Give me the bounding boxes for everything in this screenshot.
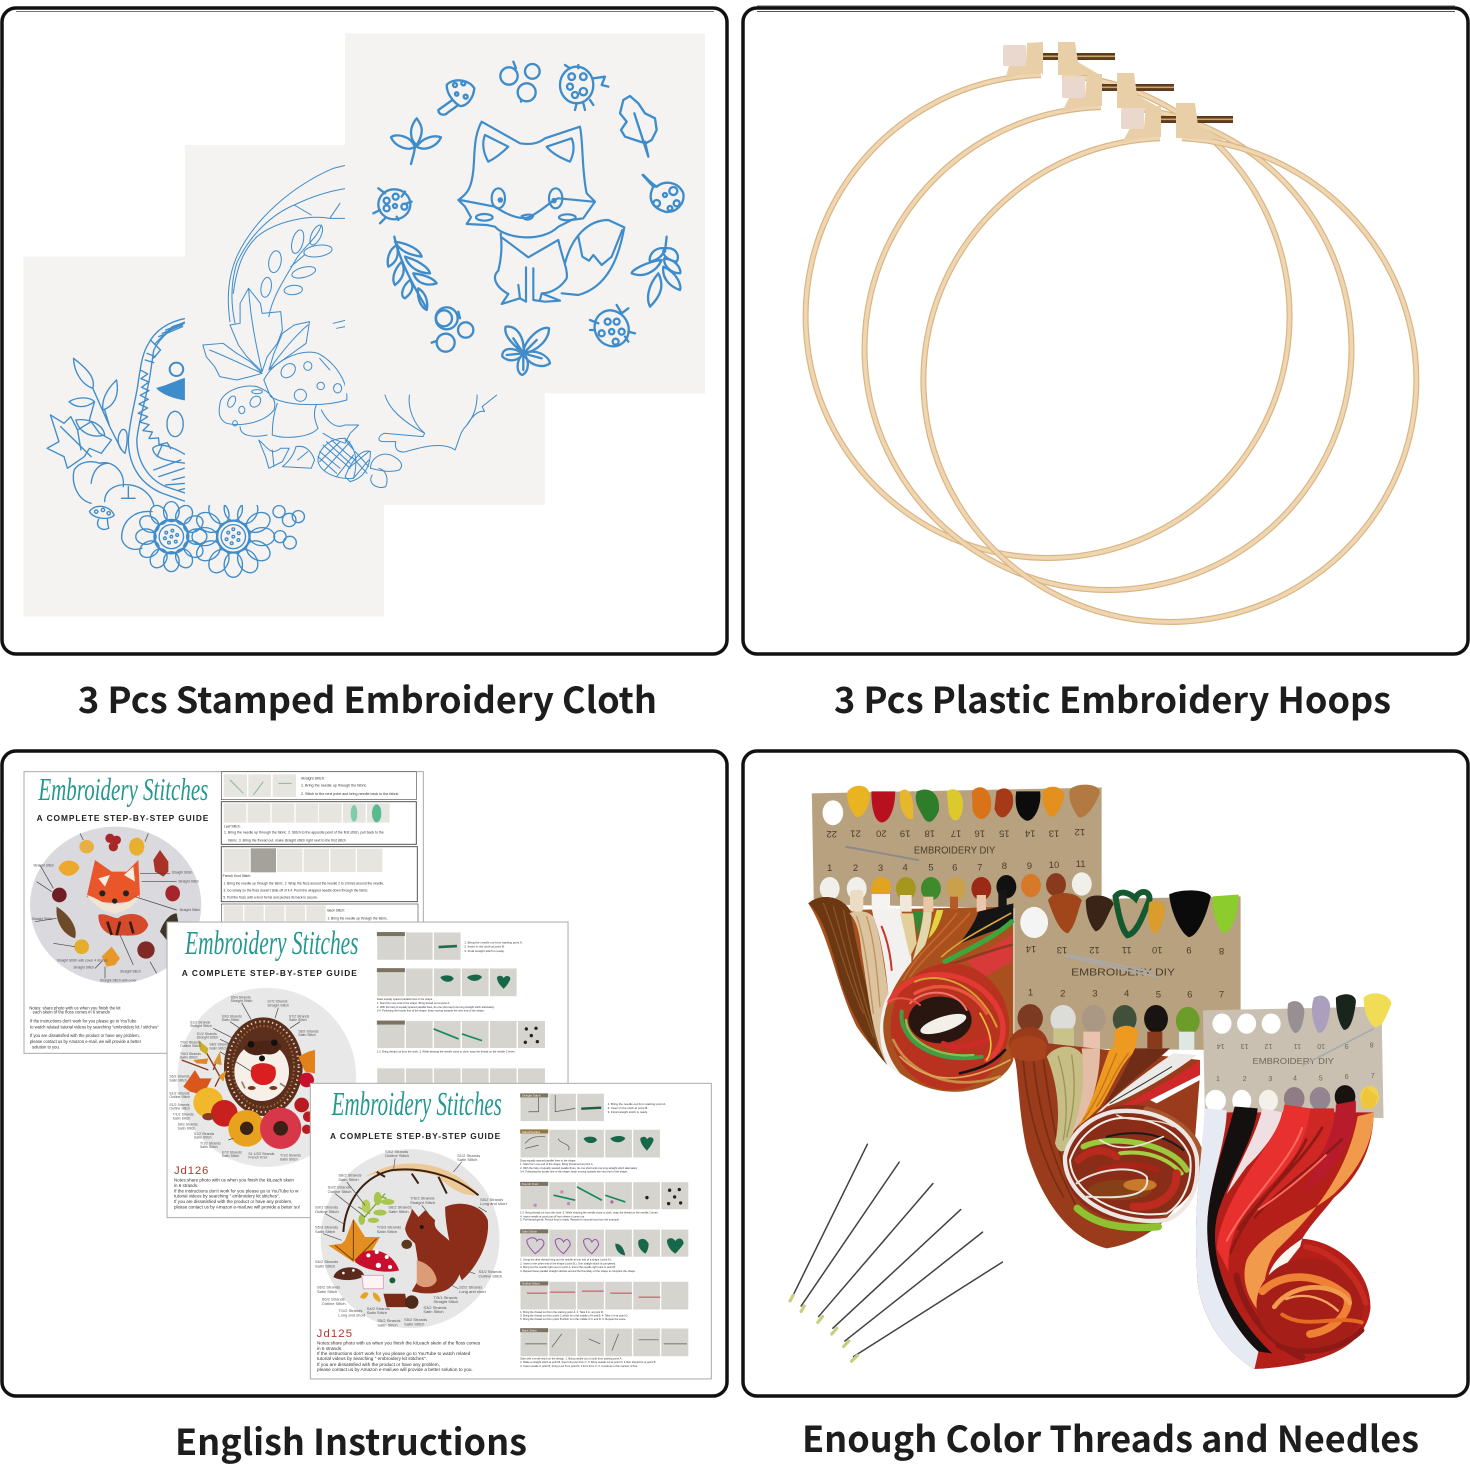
squirrel sheet stitch rows: 1. Bring the needle out from starting point A.: [608, 1102, 666, 1106]
squirrel leader labels: S5/2 Strands: [404, 1317, 427, 1322]
squirrel sheet stitch rows: 3. Final straight stitch is ready.: [608, 1110, 648, 1114]
hoop 2: [864, 73, 1351, 590]
hedgehog sheet notes: If you are dissatisfied with the product or have any problem,: [174, 1199, 292, 1204]
thread card 1: 20: [876, 828, 887, 839]
heading: instructions caption: English Instructions: [175, 1414, 527, 1466]
fox sheet leader labels: Straight Stitch: [178, 879, 199, 883]
thread card 1: 16: [974, 828, 985, 839]
thread card 1: 2: [853, 862, 858, 873]
thread card 1: 19: [900, 828, 910, 839]
fox sheet notes: solution to you.: [32, 1044, 60, 1049]
squirrel sheet stitch rows: Straight Stitch: [522, 1094, 541, 1098]
hedgehog leader labels: Straight Stitch: [231, 999, 252, 1003]
thread card 2: 10: [1152, 945, 1163, 956]
hedgehog leader labels: Satin Stitch: [180, 1056, 198, 1060]
hedgehog sheet stitch rows: Draw equally spaced parallel lines in the shape.: [377, 997, 433, 1001]
hedgehog leader labels: S1/2 Strands: [194, 1132, 214, 1136]
squirrel leader labels: S3/2 Strands: [478, 1269, 502, 1274]
squirrel sheet notes: If the instructions don't work for you please go to YouTube to watch related: [317, 1351, 471, 1356]
hedgehog sheet notes: Notes:share photo with us when you finish the kit,each skein: [174, 1177, 294, 1182]
squirrel sheet stitch rows: French Knot: [522, 1182, 538, 1186]
squirrel embroidery sample: [328, 1163, 488, 1309]
thread card 1: 10: [1049, 859, 1059, 870]
squirrel sheet stitch rows: Satin Stitch: [522, 1230, 537, 1234]
squirrel leader labels: Long and short: [338, 1312, 366, 1317]
fox sheet stitch rows: 3. Go slowly so the floss doesn't slide off of it 4. Push the wrapped needle down through the fabric.: [223, 889, 368, 893]
squirrel leader labels: S4/2 Strands: [367, 1306, 390, 1311]
sunflower left: [136, 502, 207, 572]
thread card 1: 4: [902, 861, 908, 872]
hedgehog leader labels: [169, 995, 319, 1161]
squirrel leader labels: S9/2 Strands: [385, 1149, 408, 1154]
hedgehog sheet stitch rows: [377, 932, 545, 1096]
ring of motifs around the fox: [52, 834, 180, 967]
hedgehog leader labels: S7/2 Strands: [222, 1150, 242, 1154]
hedgehog sheet stitch rows: 1. Start from one end of the shape. Bring thread out at point A.: [377, 1001, 450, 1005]
hoop 3: [923, 103, 1416, 622]
squirrel sheet stitch rows: Outline Stitch: [522, 1282, 540, 1286]
squirrel sheet stitch rows: 4. Repeat these parallel straight stitches around the boundary of the shape to complete the shape.: [520, 1269, 636, 1273]
squirrel sheet stitch rows: 3. Bring out the needle right next to point A. Insert the needle right next to point B.: [520, 1265, 616, 1269]
thread card 1: 12: [1075, 827, 1085, 838]
thread card 1: 15: [999, 828, 1010, 839]
hedgehog leader labels: Straight Stitch: [267, 1003, 289, 1007]
thread card 1: 8: [1002, 860, 1007, 871]
squirrel leader labels: Satin Stitch: [367, 1310, 387, 1315]
fox sheet stitch rows: 1. Bring the needle up through the fabric.: [327, 917, 388, 921]
thread card 1: 3: [878, 862, 883, 873]
squirrel leader labels: Straight Stitch: [410, 1200, 435, 1205]
squirrel leader labels: Satin Stitch: [404, 1321, 424, 1326]
squirrel leader labels: Satin Stitch: [377, 1322, 398, 1327]
hedgehog leader labels: Outline Stitch: [180, 1044, 201, 1048]
thread card 1: EMBROIDERY DIY: [914, 846, 995, 857]
squirrel leader labels: Outline Stitch: [315, 1209, 339, 1214]
hedgehog leader labels: Satin Stitch: [289, 1018, 307, 1022]
cloth sheet with hedgehog pattern: [23, 257, 384, 617]
squirrel leader labels: Satin Stitch: [457, 1157, 477, 1162]
squirrel sheet stitch rows: Satin/Padded: [522, 1130, 540, 1134]
squirrel leader labels: Outline Stitch: [478, 1273, 502, 1278]
hedgehog leader labels: S1/2 Strands: [197, 1032, 217, 1036]
thread card 3: 5: [1319, 1075, 1323, 1082]
squirrel sheet stitch rows: 2. Make a straight stitch at point B, then bring out from C. 3. Bring needle out at point D, it then should be at point B.: [520, 1360, 656, 1364]
hedgehog leader labels: Satin Stitch: [178, 1126, 195, 1130]
squirrel sheet stitch rows: 1. Using the dear thread bring out the needle at one end of a shape ( point A ).: [520, 1258, 612, 1262]
fox sheet leader labels: Straight Stitch with cover 4 strands: [57, 959, 108, 963]
instruction sheet with squirrel: Jd125: [317, 1328, 352, 1340]
thread card 3: 1: [1216, 1076, 1220, 1083]
thread card 3: 11: [1294, 1042, 1301, 1049]
fox sheet stitch rows: 1. Bring the needle up through the fabric. 2. Wrap the floss around the needle 2 to 3 times around the needle.: [223, 881, 384, 885]
fox sheet stitch rows: 5. Pull the floss until a knot forms and pushes its back in secure.: [223, 896, 318, 900]
thread card 2: 1: [1028, 987, 1033, 998]
fox sheet stitch rows: French Knot Stitch:: [223, 874, 251, 878]
hedgehog leader labels: S8/2 Strands: [209, 1043, 230, 1047]
fox embroidery sample: [87, 860, 148, 936]
panel: plastic embroidery hoops: [743, 6, 1468, 654]
fox sheet notes: Notes: share photo with us when you finish the kit: [29, 1005, 121, 1010]
thread card 1: 13: [1049, 828, 1059, 839]
hedgehog leader labels: S8/2 Strands: [178, 1123, 198, 1127]
hedgehog sheet stitch rows: 1-2. Bring thread out from the cloth. 3. While keeping the needle close to cloth, wrap the thread on the needle 2 times.: [377, 1049, 515, 1053]
hedgehog leader labels: S6/2 Strands: [169, 1075, 190, 1079]
hedgehog sheet stitch rows: 3-4. Following the border line of the shape, keep moving towards the next end of the shape.: [377, 1009, 485, 1013]
fox sheet stitch rows: Back Stitch:: [327, 909, 345, 913]
hedgehog leader labels: S1/2 Strands: [190, 1020, 210, 1024]
thread card 3: 12: [1264, 1042, 1272, 1049]
squirrel leader labels: S6/2 Strands: [315, 1259, 338, 1264]
hedgehog embroidery sample: [169, 995, 319, 1209]
squirrel sheet stitch rows: 3-4. Following the border line of the shape, keep moving towards the next end of the shape.: [520, 1170, 628, 1174]
hedgehog leader labels: Satin Stitch: [194, 1136, 212, 1140]
squirrel sheet stitch rows: Draw equally spaced parallel lines in the shape.: [520, 1158, 577, 1162]
squirrel sheet stitch rows: 4. Insert needle at point just off from where it came out.: [520, 1214, 585, 1218]
hedgehog leader labels: T/6/3 Strands: [180, 1052, 201, 1056]
heading: cloth caption: 3 Pcs Stamped Embroidery Cloth: [78, 672, 657, 724]
squirrel leader labels: Satin Stitch: [315, 1229, 335, 1234]
instruction sheet with squirrel: [310, 1083, 711, 1379]
hedgehog leader labels: S1/2 Strands: [169, 1103, 190, 1107]
squirrel leader labels: S1/2 Strands: [457, 1153, 480, 1158]
thread card 1: 11: [1076, 858, 1086, 869]
squirrel leader labels: S6/2 Strands: [322, 1296, 345, 1301]
squirrel leader labels: S5/2 Strands: [480, 1197, 503, 1202]
floss bundle 1: [808, 890, 1013, 1092]
thread card 3: 3: [1268, 1076, 1272, 1083]
squirrel leader labels: Straight Stitch: [433, 1299, 458, 1304]
thread card 2: [1014, 890, 1241, 1050]
thread card 2: 4: [1124, 987, 1129, 998]
squirrel leader labels: Long and short: [480, 1201, 508, 1206]
thread card 2: 13: [1057, 945, 1067, 956]
instruction sheet with hedgehog: A COMPLETE STEP-BY-STEP GUIDE: [182, 968, 357, 978]
thread card 1 with hanging floss: [808, 785, 1102, 1092]
squirrel sheet notes: [317, 1341, 481, 1372]
fox sheet stitch rows: 1. Bring the needle up through the fabric.: [301, 784, 367, 788]
thread card 2: 6: [1187, 989, 1192, 1000]
fox sheet stitch rows: fabric. 3. Bring the thread out, make straight stitch right next to the first stitch: [228, 838, 346, 842]
hedgehog sheet stitch rows: 2. Insert in the cloth at point B.: [464, 945, 505, 949]
hedgehog leader labels: Satin Stitch: [222, 1154, 239, 1158]
fox sheet stitch rows: Leaf Stitch:: [224, 824, 241, 828]
squirrel leader labels: T/5/1 Strands: [433, 1295, 457, 1300]
hedgehog sheet stitch rows: 1. Bring the needle out from starting point A.: [464, 941, 523, 945]
hedgehog leader labels: Satin Stitch: [280, 1157, 298, 1161]
thread card 1: [812, 785, 1102, 908]
fox sheet leader labels: Straight Stitch: [73, 965, 94, 969]
hedgehog leader labels: Satin Stitch: [169, 1078, 187, 1082]
fox sheet stitch rows: [221, 772, 418, 924]
hedgehog leader labels: T/1/2 Strands: [280, 1154, 301, 1158]
squirrel leader labels: [315, 1149, 508, 1327]
thread card 3 with hanging floss: [1196, 993, 1391, 1369]
fox sheet leader labels: Straight Stitch with cover: [100, 979, 138, 983]
squirrel leader labels: T/S/3 Strands: [377, 1225, 401, 1230]
squirrel sheet stitch rows: Start with a small stitch on the design. 1. Bring needle out of cloth from starting point A.: [520, 1357, 622, 1361]
hedgehog leader labels: T/1/2 Strands: [173, 1113, 194, 1117]
fox sheet notes: [29, 1005, 159, 1049]
instruction sheet with hedgehog: [167, 922, 568, 1218]
thread card 3: 8: [1370, 1040, 1374, 1047]
floss bundle 2: [1008, 1005, 1200, 1248]
instruction sheet with fox: Embroidery Stitches: [38, 771, 208, 807]
fox figure: [458, 122, 624, 304]
floss bundle 3: [1196, 1087, 1378, 1369]
squirrel leader labels: T/1/2 Strands: [338, 1308, 362, 1313]
fox sheet notes: If you are dissatisfied with the product or have any problem,: [30, 1033, 140, 1038]
panel: threads and needles: [743, 751, 1468, 1396]
thread card 2: 2: [1060, 987, 1065, 998]
thread card 3: 2: [1243, 1076, 1247, 1083]
squirrel leader labels: Satin Stitch: [315, 1263, 335, 1268]
thread card 2: 7: [1219, 989, 1224, 1000]
hedgehog leader labels: S8/2 Strands: [298, 1029, 319, 1033]
thread card 3: [1203, 993, 1391, 1118]
hedgehog leader labels: Outline Stitch: [169, 1107, 190, 1111]
hedgehog leader labels: T/1/2 Strands: [200, 1141, 221, 1145]
hedgehog leader labels: Outline Stitch: [169, 1095, 190, 1099]
squirrel leader labels: S3/2 Strands: [423, 1305, 447, 1310]
thread card 2 with hanging floss: [1008, 890, 1241, 1248]
squirrel leader labels: S6/2 Strands: [317, 1285, 340, 1290]
thread card 1: 1: [827, 862, 832, 873]
squirrel sheet notes: please contact us by Amazon e-mail,we will provide a better solution to you.: [317, 1367, 473, 1372]
squirrel leader labels: Outline Stitch: [322, 1301, 345, 1306]
thread card 3: 10: [1317, 1042, 1325, 1049]
hoop 1: [806, 42, 1290, 558]
thread card 1: 5: [928, 861, 934, 872]
thread card 2: 3: [1092, 987, 1098, 998]
squirrel leader labels: Satin Stitch: [338, 1177, 359, 1182]
thread card 3: 7: [1371, 1073, 1375, 1080]
instruction sheet with fox: [24, 771, 423, 1053]
hedgehog leader labels: S5/4 Strands: [231, 995, 251, 999]
thread card 1: 18: [924, 828, 935, 839]
hedgehog leader labels: Satin Stitch: [173, 1116, 190, 1120]
instruction sheet with hedgehog: Embroidery Stitches: [184, 925, 359, 962]
squirrel sheet notes: If you are dissatisfied with the product or have any problem,: [317, 1362, 440, 1367]
fox sheet stitch rows: Straight Stitch:: [301, 777, 325, 781]
hedgehog leader labels: Satin Stitch: [298, 1033, 316, 1037]
hedgehog sheet stitch rows: 2. With the help of equally spaced parallel lines, do one short and one long straight stitch alternately.: [377, 1005, 495, 1009]
thread card 2: 14: [1026, 944, 1036, 955]
squirrel sheet stitch rows: 4. Insert needle in point B, bring it out from point D, it from from C. 5. Continue in this manner of line.: [520, 1364, 638, 1368]
squirrel sheet notes: tutorial videos by searching " embroidery kit stitches".: [317, 1356, 427, 1361]
squirrel sheet stitch rows: 2. Insert in the other end of the shape ( point B ). One straight stitch is completed.: [520, 1261, 616, 1265]
squirrel sheet stitch rows: 1. Start from one end of the shape. Bring thread out at point A.: [520, 1162, 594, 1166]
squirrel leader labels: Outline Stitch: [328, 1189, 351, 1194]
thread card 1: 22: [826, 829, 837, 840]
thread card 1: 9: [1027, 860, 1032, 871]
squirrel leader labels: S6/2 Strands: [388, 1205, 412, 1210]
hedgehog leader labels: S1/2 Strands: [169, 1091, 190, 1095]
embroidery needles: [790, 1144, 1002, 1361]
hedgehog leader labels: Satin Stitch: [200, 1145, 218, 1149]
hedgehog sheet notes: tutorial videos by searching " embroidery kit stitches".: [174, 1193, 280, 1198]
hedgehog leader labels: French Knot: [248, 1156, 267, 1160]
hedgehog leader labels: T/6/2 Strands: [180, 1040, 201, 1044]
fox sheet notes: If the instructions don't work for you please go to YouTube: [30, 1018, 137, 1023]
heading: threads caption: Enough Color Threads and Needles: [802, 1411, 1419, 1463]
fox sheet leader labels: Straight Stitch: [179, 908, 200, 912]
fox sheet leader labels: Straight Stitch: [120, 969, 141, 973]
squirrel sheet notes: Notes:share photo with us when you finish the kit,each skein of the floss comes: [317, 1341, 481, 1346]
thread card 3: 6: [1345, 1074, 1349, 1081]
hedgehog sheet notes: [174, 1177, 300, 1209]
hedgehog embroidery sample: Jd126: [174, 1165, 208, 1177]
squirrel sheet stitch rows: 1-2. Bring thread out from the cloth. 3. While keeping the needle close to cloth, wrap the thread on the needle 2 times.: [520, 1211, 659, 1215]
thread card 2: 5: [1156, 989, 1161, 1000]
squirrel leader labels: Satin Stitch: [423, 1309, 444, 1314]
fox sheet notes: to watch related tutorial videos by searching "embroidery kit / stitches": [30, 1024, 159, 1029]
fox sheet stitch rows: 2. Stitch to the next point and bring needle back to the fabric.: [301, 792, 399, 796]
hedgehog leader labels: Satin Stitch: [222, 1018, 239, 1022]
fox border motifs: [373, 62, 684, 375]
squirrel leader labels: S9/2 Strands: [328, 1185, 351, 1190]
squirrel sheet stitch rows: 3. Bring the thread out from point C which is in the middle of A and B. 4. Take it in at point D.: [520, 1313, 628, 1317]
squirrel sheet stitch rows: 1. Bring the thread out from the starting point A. 2. Take it in, at point B.: [520, 1310, 604, 1314]
hedgehog leader labels: Straight Stitch: [197, 1036, 218, 1040]
thread card 2: 11: [1122, 945, 1132, 956]
thread card 1: 6: [952, 861, 957, 872]
squirrel leader labels: Outline Stitch: [385, 1153, 409, 1158]
hedgehog leader labels: S9/3 Strands: [222, 1014, 242, 1018]
thread card 2: EMBROIDERY DIY: [1071, 966, 1175, 978]
squirrel leader labels: S2/2 Strands: [459, 1285, 482, 1290]
thread card 3: EMBROIDERY DIY: [1253, 1056, 1334, 1066]
squirrel leader labels: S8/2 Strands: [338, 1173, 361, 1178]
thread card 2: 12: [1089, 945, 1100, 956]
cloth sheet with mushroom and squirrel pattern: [185, 145, 545, 505]
fox sheet leader labels: [32, 833, 200, 983]
hedgehog leader labels: Satin Stitch: [209, 1046, 227, 1050]
squirrel leader labels: Satin Stitch: [388, 1209, 409, 1214]
fox sheet leader labels: Straight Stitch: [32, 917, 53, 921]
heading: hoops caption: 3 Pcs Plastic Embroidery Hoops: [834, 672, 1391, 724]
squirrel sheet stitch rows: 2. Insert in the cloth at point B.: [608, 1106, 648, 1110]
hedgehog leader labels: S7/2 Strands: [289, 1014, 309, 1018]
sunflower right: [192, 496, 275, 577]
hedgehog sheet notes: in 6 strands.: [174, 1183, 198, 1188]
thread card 2: 9: [1186, 945, 1192, 956]
squirrel sheet stitch rows: 5. Bring the thread out from point B which is in the middle of C and D. 6. Repeat the same.: [520, 1317, 627, 1321]
squirrel leader labels: Long and short: [459, 1289, 487, 1294]
thread card 3: 14: [1217, 1042, 1225, 1049]
hedgehog sheet stitch rows: 3. Final straight stitch is ready.: [464, 949, 505, 953]
squirrel leader labels: Satin Stitch: [377, 1229, 397, 1234]
instruction sheet with squirrel: Embroidery Stitches: [331, 1086, 502, 1123]
squirrel leader labels: S5/2 Strands: [377, 1318, 401, 1323]
squirrel leader labels: S5/3 Strands: [315, 1225, 338, 1230]
thread card 1: 17: [951, 828, 961, 839]
cloth sheet with fox pattern: [345, 33, 705, 393]
thread card 3: 4: [1293, 1075, 1297, 1082]
hedgehog leader labels: S7/2 Strands: [267, 1000, 288, 1004]
thread card 3: 13: [1241, 1042, 1249, 1049]
squirrel sheet notes: in 6 strands.: [317, 1346, 342, 1351]
squirrel sheet stitch rows: Back Stitch: [522, 1329, 537, 1333]
panel: english instructions: [2, 751, 727, 1396]
squirrel sheet stitch rows: 5. Pull thread gently. French knot is ready. Repeat for second knot from the example.: [520, 1218, 620, 1222]
squirrel sheet stitch rows: 2. With the help of equally spaced parallel lines, do one short and one long straight stitch alternately.: [520, 1166, 638, 1170]
squirrel sheet stitch rows: [520, 1093, 689, 1368]
fox sheet notes: each skein of the floss comes in 6 strands: [33, 1010, 110, 1015]
instruction sheet with fox: A COMPLETE STEP-BY-STEP GUIDE: [37, 813, 209, 823]
squirrel leader labels: T/S/2 Strands: [410, 1196, 435, 1201]
squirrel leader labels: S9/1 Strands: [315, 1205, 338, 1210]
panel: stamped embroidery cloth: [2, 8, 727, 654]
thread card 1: 14: [1025, 828, 1035, 839]
fox sheet leader labels: Straight Stitch: [172, 870, 193, 874]
hedgehog sheet notes: If the instructions don't work for you please go to YouTube to w: [174, 1188, 299, 1193]
thread card 1: 7: [977, 861, 982, 872]
hedgehog sheet notes: please contact us by Amazon e-mail,we will provide a better sol: [174, 1204, 300, 1209]
fox sheet stitch rows: 1. Bring the needle up through the fabric. 2. Stitch to the apposite point of the first stitch, pull back to the: [224, 831, 384, 835]
fox sheet leader labels: Straight Stitch: [33, 864, 54, 868]
thread card 3: 9: [1345, 1042, 1349, 1049]
hedgehog leader labels: S1 1/2/2 Strands: [248, 1152, 275, 1156]
thread card 2: 8: [1219, 946, 1224, 957]
hedgehog leader labels: Straight Stitch: [190, 1024, 212, 1028]
thread card 1: 21: [850, 828, 861, 839]
instruction sheet with squirrel: A COMPLETE STEP-BY-STEP GUIDE: [330, 1131, 501, 1141]
squirrel leader labels: Satin Stitch: [317, 1289, 337, 1294]
fox sheet notes: please contact us by Amazon e-mail, we will provide a better: [30, 1039, 142, 1044]
